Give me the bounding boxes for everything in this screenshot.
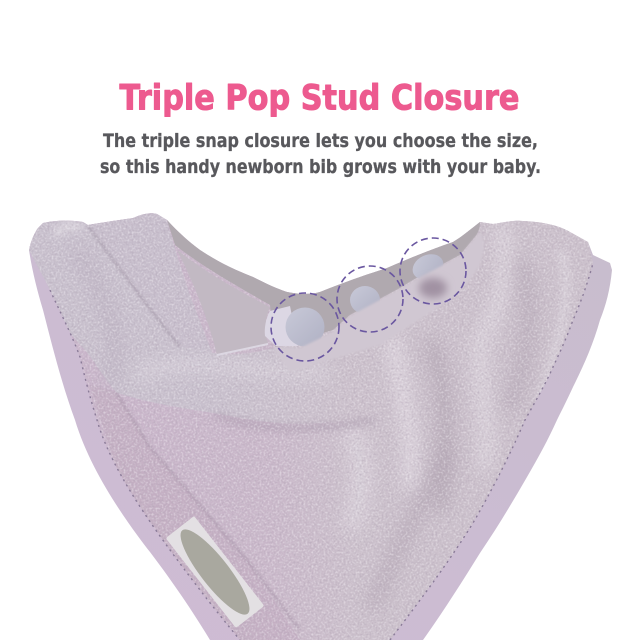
lower panel edge shadow [116, 392, 300, 630]
right panel folds [350, 225, 566, 610]
back hood layer [90, 214, 196, 348]
hood fold shading [88, 226, 180, 347]
horizontal crease under the roll [215, 415, 375, 428]
bib terry body [29, 213, 593, 640]
snap 3 [408, 249, 448, 285]
description text [100, 130, 541, 178]
dashed circle 3 [400, 238, 466, 304]
description text: so this handy newborn bib grows with your baby. [100, 156, 541, 178]
front roll of the hood [30, 221, 278, 420]
snap tab [265, 306, 298, 346]
bib trim border [29, 213, 612, 640]
flap edge over the snaps [272, 232, 484, 372]
dashed circle 2 [337, 266, 403, 332]
lower-left strip beside trim [270, 596, 300, 640]
title: Triple Pop Stud Closure [120, 78, 520, 118]
description text: The triple snap closure lets you choose the size, [103, 130, 538, 152]
snap 1 [286, 308, 324, 346]
bib photo illustration [29, 213, 612, 640]
brand label [166, 516, 264, 628]
bib stitch line [50, 263, 593, 640]
inner lining panel [177, 250, 270, 355]
snap 2 [350, 286, 380, 314]
dashed circle 1 [271, 293, 339, 361]
dark shadow patch in circle 3 [419, 278, 447, 298]
lining seam [217, 344, 268, 355]
neck band [167, 220, 480, 347]
terry texture [30, 214, 592, 640]
